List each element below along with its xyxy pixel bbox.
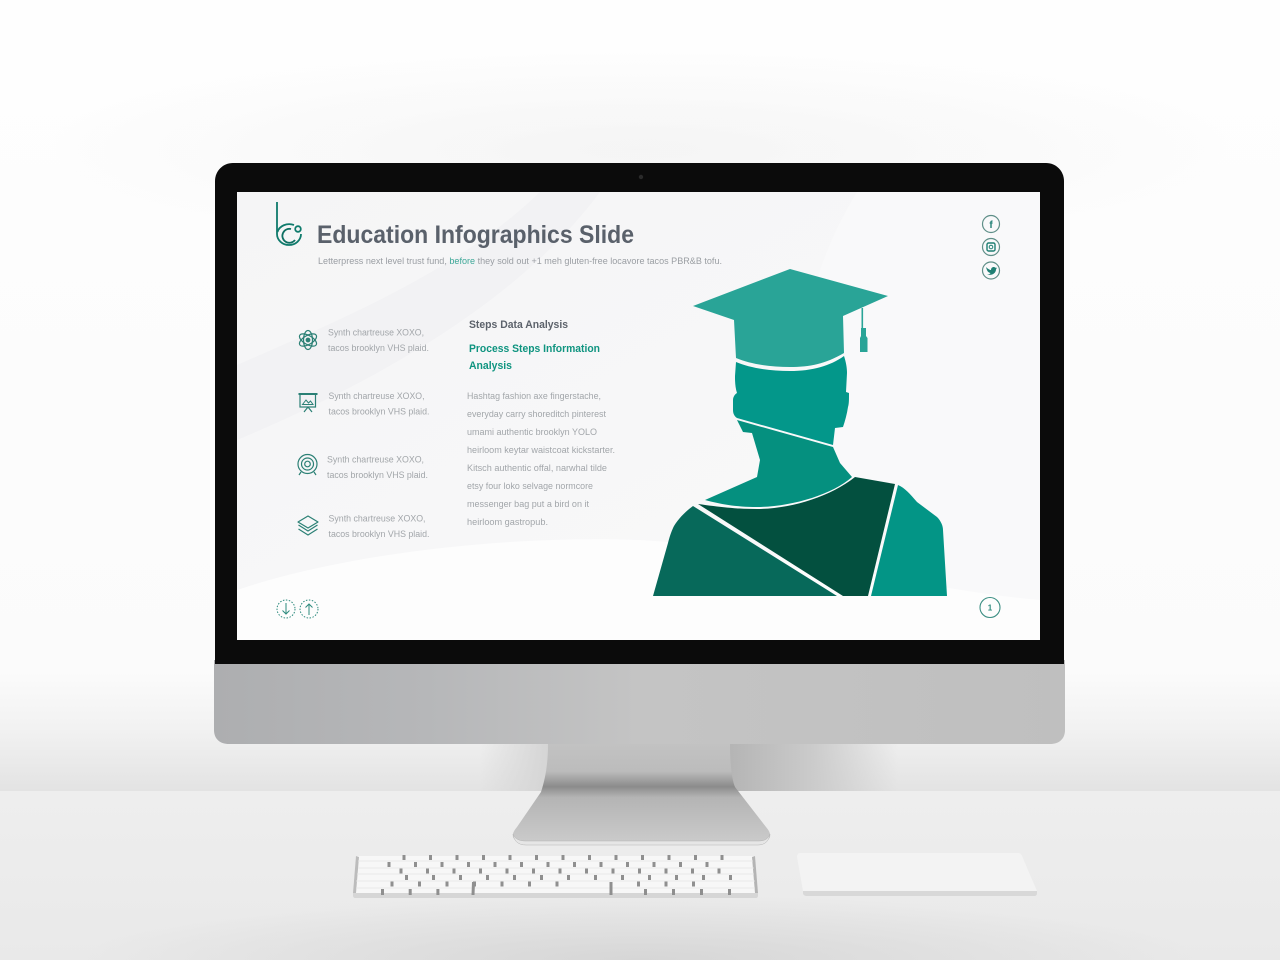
text: item three <box>327 454 428 480</box>
left body <box>653 506 837 596</box>
arrow up <box>300 600 318 618</box>
icon: facebook: f <box>989 220 993 231</box>
right body <box>871 485 947 596</box>
head <box>733 356 849 445</box>
monitor stand <box>513 744 770 845</box>
body text: messenger bag put a bird on it <box>467 499 590 509</box>
icon: twitter <box>982 262 1000 279</box>
body text: umami authentic brooklyn YOLO <box>467 427 597 437</box>
text: item two: tacos brooklyn VHS plaid. <box>328 406 430 416</box>
keyboard row separators <box>356 861 755 888</box>
heading: process steps <box>469 343 600 372</box>
body text: heirloom gastropub. <box>467 517 548 527</box>
monitor chin <box>214 660 1065 744</box>
arrow down <box>277 600 295 618</box>
graduate figure <box>653 269 947 596</box>
icon: presentation board <box>298 394 318 412</box>
stand shadow on wall <box>728 744 898 791</box>
text: item one: Synth chartreuse XOXO, <box>328 328 424 338</box>
logo <box>277 202 301 245</box>
text: item two <box>328 391 430 416</box>
sash <box>698 477 895 596</box>
subtitle: Letterpress next level trust fund, before they sold out +1 meh gluten-free locavore tacos PBR&B tofu. <box>318 256 722 266</box>
desk surface <box>0 791 1280 960</box>
camera <box>639 175 643 179</box>
text: item four: tacos brooklyn VHS plaid. <box>328 529 430 539</box>
heading: process steps: Process Steps Information <box>469 343 600 355</box>
text: item one <box>328 328 429 353</box>
monitor bezel <box>215 163 1064 664</box>
body text: Kitsch authentic offal, narwhal tilde <box>467 463 607 473</box>
page number: 1 <box>988 604 993 612</box>
wall glow <box>40 50 1240 250</box>
heading: steps data analysis: Steps Data Analysis <box>469 319 568 331</box>
icon: layers <box>298 516 318 535</box>
body text: Hashtag fashion axe fingerstache, <box>467 391 601 401</box>
page number <box>980 598 1000 618</box>
text: item three: tacos brooklyn VHS plaid. <box>327 470 428 480</box>
neck <box>705 420 852 507</box>
keyboard key gaps <box>381 858 735 895</box>
trackpad <box>797 853 1037 896</box>
desk shade <box>80 830 1200 960</box>
text: item four <box>328 514 430 539</box>
graduation cap <box>693 269 888 367</box>
body text: everyday carry shoreditch pinterest <box>467 409 607 419</box>
text: item three: Synth chartreuse XOXO, <box>327 454 424 464</box>
stand shadow on left wall <box>480 744 550 791</box>
title: Education Infographics Slide <box>317 221 634 249</box>
icon: atom <box>298 330 318 350</box>
slide background <box>237 192 1040 640</box>
monitor <box>214 163 1065 744</box>
heading: process steps: Analysis <box>469 360 512 372</box>
body text: heirloom keytar waistcoat kickstarter. <box>467 445 615 455</box>
text: item one: tacos brooklyn VHS plaid. <box>328 343 429 353</box>
navigation arrows <box>277 600 318 618</box>
body text: etsy four loko selvage normcore <box>467 481 593 491</box>
slide screen <box>237 192 1040 640</box>
body text <box>467 391 615 527</box>
icon: target <box>298 454 317 475</box>
icon: instagram <box>982 238 1000 256</box>
social icons <box>982 216 1000 279</box>
keyboard <box>353 856 758 898</box>
text: item two: Synth chartreuse XOXO, <box>328 391 424 401</box>
text: item four: Synth chartreuse XOXO, <box>328 514 426 524</box>
tassel <box>860 308 868 352</box>
